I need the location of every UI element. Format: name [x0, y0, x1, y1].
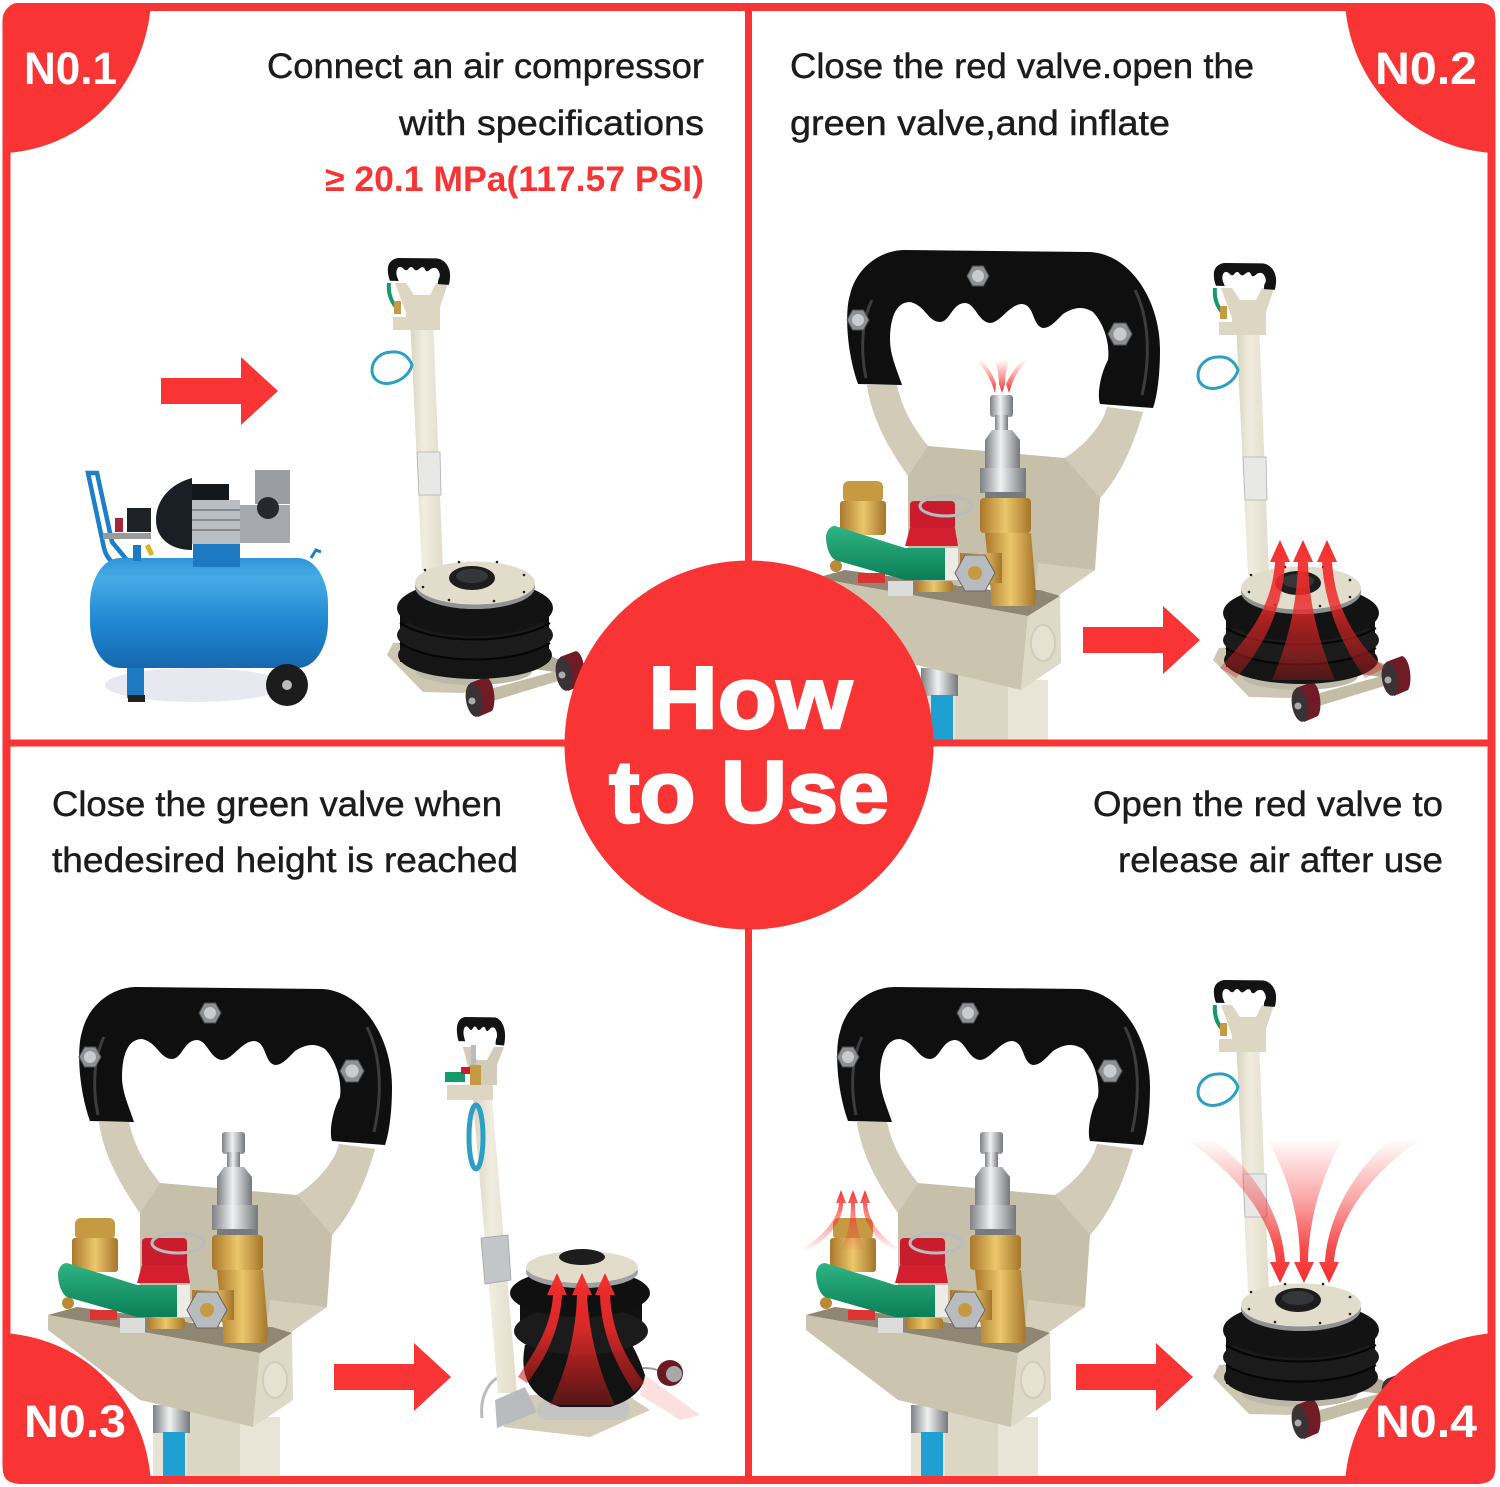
- compressor: [88, 470, 328, 706]
- jack: [1198, 980, 1410, 1440]
- badge: N0.1: [6, 3, 151, 153]
- raised jack: [445, 1017, 683, 1437]
- instruction text: [267, 47, 704, 199]
- instruction text: [1093, 785, 1443, 880]
- air flow arrows: [518, 1273, 700, 1420]
- valve closeup: [48, 987, 392, 1477]
- air flow arrows: [1187, 1140, 1420, 1283]
- panel: step 4 release air: [804, 785, 1443, 1477]
- instruction text: green valve,and inflate: [790, 104, 1170, 143]
- instruction text: ≥ 20.1 MPa(117.57 PSI): [325, 160, 704, 199]
- arrow: [161, 357, 278, 425]
- instruction text: [790, 47, 1254, 143]
- badge: N0.3: [3, 1333, 151, 1483]
- panel: step 2 inflate: [790, 47, 1410, 740]
- instruction text: thedesired height is reached: [52, 841, 518, 880]
- instruction text: release air after use: [1118, 841, 1443, 880]
- arrow: [1083, 606, 1200, 674]
- air flow arrows: [1220, 540, 1385, 680]
- instruction text: Close the green valve when: [52, 785, 502, 824]
- jack: [1198, 263, 1410, 723]
- panel: step 1 connect compressor: [88, 47, 704, 718]
- badge: N0.2: N0.2: [1375, 43, 1477, 94]
- panel: step 3 hold height: [48, 785, 700, 1477]
- arrow: [1076, 1343, 1193, 1411]
- arrow: [334, 1343, 451, 1411]
- instruction text: with specifications: [398, 104, 704, 143]
- instruction text: Connect an air compressor: [267, 47, 704, 86]
- badge: N0.1: N0.1: [24, 43, 117, 94]
- instruction text: Open the red valve to: [1093, 785, 1443, 824]
- valve closeup: [816, 250, 1160, 740]
- jack: [372, 258, 584, 718]
- badge: N0.4: [1345, 1333, 1495, 1483]
- central title circle: How: [648, 648, 853, 747]
- central title circle: [564, 560, 934, 930]
- badge: N0.2: [1345, 3, 1495, 153]
- small air arrows: [977, 360, 1027, 393]
- badge: N0.4: N0.4: [1375, 1396, 1477, 1447]
- badge: N0.3: N0.3: [24, 1396, 126, 1447]
- instruction text: Close the red valve.open the: [790, 47, 1254, 86]
- central title circle: to Use: [609, 742, 889, 841]
- valve closeup: [806, 987, 1150, 1477]
- small air arrows: [804, 1190, 898, 1250]
- instruction text: [52, 785, 518, 880]
